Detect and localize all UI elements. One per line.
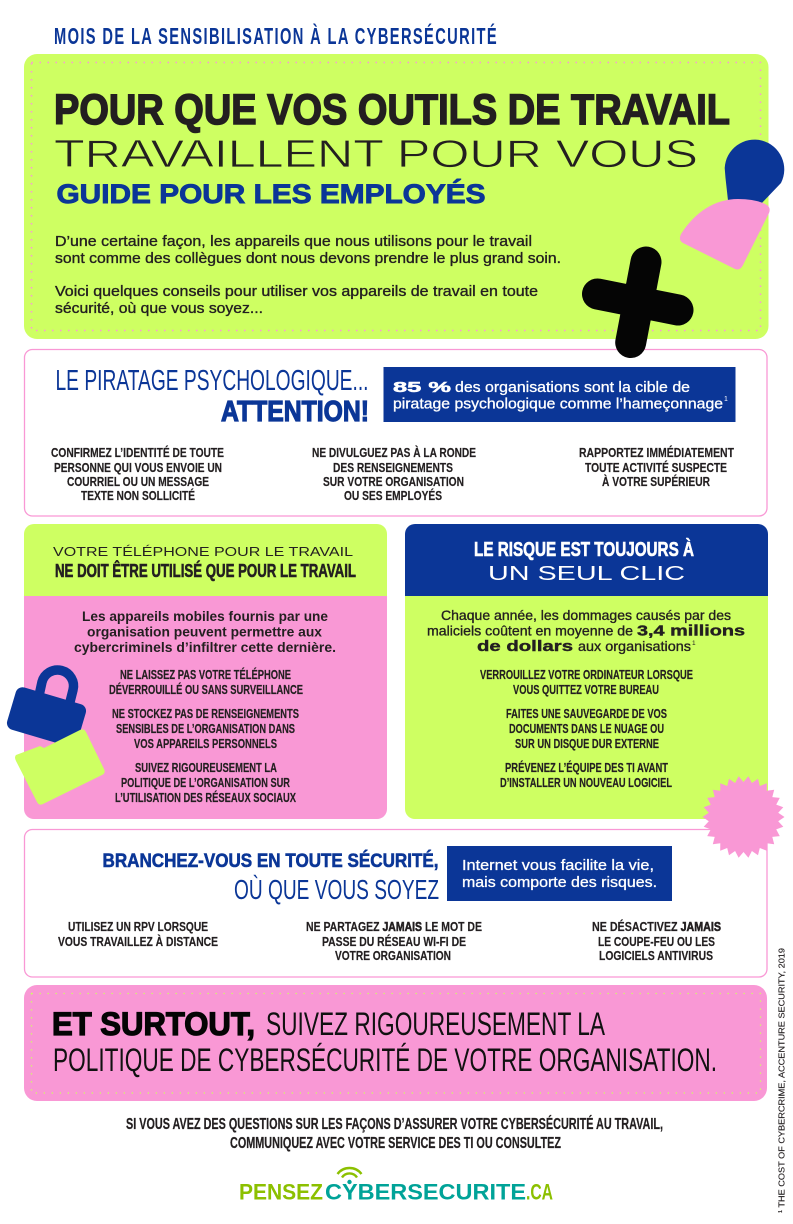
tip: confirm identity: CONFIRMEZ L’IDENTITÉ DE TOUTE xyxy=(51,445,224,460)
panel: intro xyxy=(24,54,768,339)
text block: maliciels coûtent en moyenne de xyxy=(427,622,633,638)
tip: firewall xyxy=(592,919,721,963)
panel: work phone xyxy=(24,524,387,819)
callout: 85 %: 1 xyxy=(724,396,728,403)
contact text xyxy=(126,1114,663,1152)
tip: report: RAPPORTEZ IMMÉDIATEMENT xyxy=(579,445,734,460)
intro text: sont comme des collègues dont nous devons prendre le plus grand soin. xyxy=(55,251,561,267)
tips: computer xyxy=(480,668,693,790)
tip: firewall: NE DÉSACTIVEZ JAMAIS xyxy=(592,919,721,934)
tip: firewall: LE COUPE-FEU OU LES xyxy=(598,935,715,949)
closing statement xyxy=(52,1006,717,1078)
tip: report: TOUTE ACTIVITÉ SUSPECTE xyxy=(585,460,727,475)
tip: confirm identity: PERSONNE QUI VOUS ENVOIE UN xyxy=(54,461,222,475)
tips: phone: NE STOCKEZ PAS DE RENSEIGNEMENTS xyxy=(112,707,299,721)
heading: NE DOIT ÊTRE UTILISÉ QUE POUR LE TRAVAIL xyxy=(55,560,356,581)
tip: do not disclose xyxy=(312,445,476,503)
tips: phone: NE LAISSEZ PAS VOTRE TÉLÉPHONE xyxy=(120,667,291,682)
tip: do not disclose: OU SES EMPLOYÉS xyxy=(344,488,442,503)
intro text: Voici quelques conseils pour utiliser vos appareils de travail en toute xyxy=(55,284,538,300)
title xyxy=(54,86,730,176)
icon: plus and shapes xyxy=(598,140,784,342)
callout: internet: mais comporte des risques. xyxy=(462,875,657,891)
callout: 85 % xyxy=(384,367,736,422)
tips: computer: DOCUMENTS DANS LE NUAGE OU xyxy=(509,722,664,736)
tip: report: À VOTRE SUPÉRIEUR xyxy=(602,474,710,489)
text block: cybercriminels d’infiltrer cette dernière. xyxy=(74,640,336,655)
header: awareness month: MOIS DE LA SENSIBILISATION À LA CYBERSÉCURITÉ xyxy=(54,22,498,49)
text block: Chaque année, les dommages causés par des xyxy=(441,607,731,623)
heading: UN SEUL CLIC xyxy=(488,563,685,585)
logo: pensezcybersecurite.ca: .CA xyxy=(526,1180,553,1204)
tips: phone: VOS APPAREILS PERSONNELS xyxy=(134,737,277,751)
heading xyxy=(474,538,694,585)
text block: 1 xyxy=(692,640,696,647)
callout: internet xyxy=(447,846,672,901)
tip: wi-fi password: NE PARTAGEZ JAMAIS LE MOT DE xyxy=(306,920,482,934)
source note: ¹ THE COST OF CYBERCRIME, ACCENTURE SECURITY, 2019 xyxy=(776,948,786,1213)
panel: above all xyxy=(24,985,767,1101)
heading: LE PIRATAGE PSYCHOLOGIQUE... xyxy=(56,365,368,397)
text block: Les appareils mobiles fournis par une xyxy=(82,609,328,624)
icon: padlock and folder xyxy=(5,670,105,805)
tips: phone: DÉVERROUILLÉ OU SANS SURVEILLANCE xyxy=(109,682,303,697)
tip: report xyxy=(579,445,734,489)
text block xyxy=(427,607,745,655)
panel: connect safely xyxy=(24,830,767,977)
logo: pensezcybersecurite.ca xyxy=(239,1168,553,1204)
heading: ATTENTION! xyxy=(221,396,369,428)
tips: computer: FAITES UNE SAUVEGARDE DE VOS xyxy=(506,707,667,721)
tip: wi-fi password: PASSE DU RÉSEAU WI-FI DE xyxy=(322,934,466,949)
text block: de dollars xyxy=(477,639,573,655)
callout: 85 %: des organisations sont la cible de xyxy=(455,380,690,396)
callout: 85 %: piratage psychologique comme l’hameçonnage xyxy=(393,396,723,412)
intro text: D’une certaine façon, les appareils que nous utilisons pour le travail xyxy=(55,234,532,250)
tips: phone: SENSIBLES DE L’ORGANISATION DANS xyxy=(116,722,295,736)
tip: do not disclose: NE DIVULGUEZ PAS À LA RONDE xyxy=(312,445,476,460)
text block xyxy=(74,609,336,655)
logo: pensezcybersecurite.ca: PENSEZ xyxy=(239,1180,323,1204)
tips: computer: SUR UN DISQUE DUR EXTERNE xyxy=(515,737,659,751)
subtitle: GUIDE POUR LES EMPLOYÉS xyxy=(56,178,486,209)
closing statement: ET SURTOUT, xyxy=(52,1006,255,1042)
tip: do not disclose: SUR VOTRE ORGANISATION xyxy=(323,475,464,489)
tip: confirm identity: COURRIEL OU UN MESSAGE xyxy=(67,475,209,489)
heading: LE RISQUE EST TOUJOURS À xyxy=(474,538,694,561)
tips: computer: VERROUILLEZ VOTRE ORDINATEUR LORSQUE xyxy=(480,668,693,682)
tips: computer: VOUS QUITTEZ VOTRE BUREAU xyxy=(513,683,659,697)
tip: do not disclose: DES RENSEIGNEMENTS xyxy=(333,461,453,475)
logo: pensezcybersecurite.ca: CYBERSECURITE xyxy=(325,1180,526,1204)
text block: organisation peuvent permettre aux xyxy=(87,624,322,640)
tip: wi-fi password xyxy=(306,920,482,963)
tip: VPN: UTILISEZ UN RPV LORSQUE xyxy=(68,920,208,934)
heading: OÙ QUE VOUS SOYEZ xyxy=(234,874,439,905)
tip: wi-fi password: VOTRE ORGANISATION xyxy=(335,949,451,963)
callout: internet: Internet vous facilite la vie, xyxy=(462,858,654,874)
tips: phone: L’UTILISATION DES RÉSEAUX SOCIAUX xyxy=(115,790,296,805)
title: TRAVAILLENT POUR VOUS xyxy=(54,133,698,176)
tips: computer: PRÉVENEZ L’ÉQUIPE DES TI AVANT xyxy=(505,760,668,775)
tips: phone: SUIVEZ RIGOUREUSEMENT LA xyxy=(135,761,277,775)
tips: phone: POLITIQUE DE L’ORGANISATION SUR xyxy=(121,776,290,790)
text block: 3,4 millions xyxy=(637,624,745,640)
icon: pink starburst xyxy=(702,776,784,858)
heading xyxy=(102,849,439,905)
intro text xyxy=(55,234,561,317)
heading xyxy=(53,544,356,581)
tip: VPN xyxy=(58,920,218,949)
contact text: COMMUNIQUEZ AVEC VOTRE SERVICE DES TI OU CONSULTEZ xyxy=(230,1135,561,1152)
panel: social engineering xyxy=(24,350,767,516)
tips: phone xyxy=(109,667,303,805)
heading: VOTRE TÉLÉPHONE POUR LE TRAVAIL xyxy=(53,544,353,559)
callout: 85 %: 85 % xyxy=(393,379,451,396)
tip: confirm identity xyxy=(51,445,224,503)
heading xyxy=(56,365,369,428)
panel: one click risk xyxy=(405,524,768,819)
tip: firewall: LOGICIELS ANTIVIRUS xyxy=(599,949,713,963)
text block: aux organisations xyxy=(578,638,691,654)
tip: confirm identity: TEXTE NON SOLLICITÉ xyxy=(81,488,195,503)
closing statement: SUIVEZ RIGOUREUSEMENT LA xyxy=(266,1006,605,1042)
heading: BRANCHEZ-VOUS EN TOUTE SÉCURITÉ, xyxy=(102,849,438,872)
tip: VPN: VOUS TRAVAILLEZ À DISTANCE xyxy=(58,934,218,949)
intro text: sécurité, où que vous soyez... xyxy=(55,301,263,317)
tips: computer: D’INSTALLER UN NOUVEAU LOGICIEL xyxy=(500,776,672,790)
